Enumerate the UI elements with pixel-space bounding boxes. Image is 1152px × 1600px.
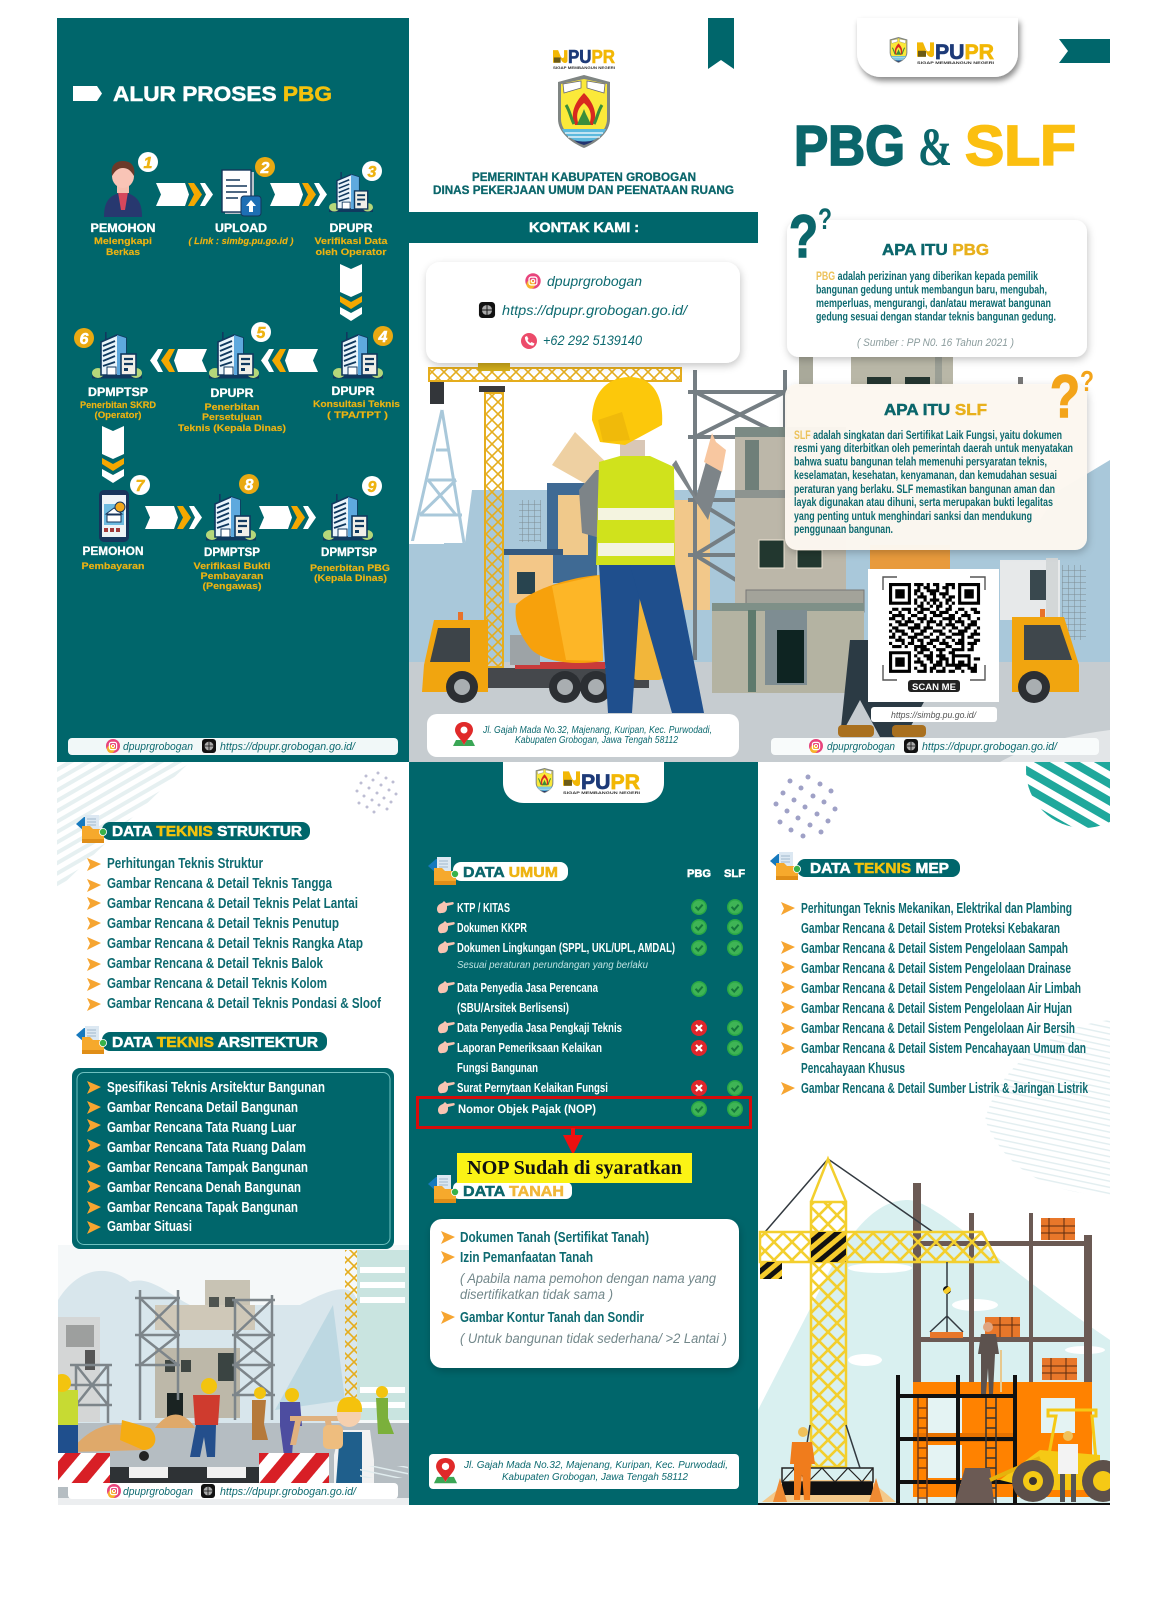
heading: data teknis arsitektur bbox=[76, 1026, 327, 1054]
definition: resmi yang diterbitkan oleh pemerintah daerah untuk menyatakan bbox=[794, 443, 1073, 455]
right background building bbox=[1000, 558, 1086, 648]
heading: data teknis MEP: DATA TEKNIS MEP bbox=[810, 860, 949, 877]
standing worker bbox=[978, 1322, 1002, 1394]
ladders bbox=[918, 1398, 927, 1503]
panel: kontak header bbox=[433, 18, 734, 197]
step 7: pemohon bbox=[82, 475, 150, 572]
checklist: Laporan Pemeriksaan Kelaikan bbox=[457, 1041, 602, 1055]
step 9: dpmptsp: (Kepala Dinas) bbox=[314, 573, 387, 584]
arrow 8-9 bbox=[259, 506, 316, 529]
tab: logos bbox=[857, 18, 1018, 77]
step 9: dpmptsp bbox=[310, 476, 390, 584]
step 5: dpupr bbox=[178, 322, 286, 434]
icon: building bbox=[206, 494, 256, 540]
title: SLF bbox=[965, 114, 1076, 178]
worker bbox=[552, 377, 726, 713]
right truck bbox=[1012, 609, 1079, 703]
step 5: dpupr: Persetujuan bbox=[202, 412, 262, 423]
phone: +62 292 5139140 bbox=[543, 332, 642, 348]
checklist: Data Penyedia Jasa Perencana bbox=[457, 981, 599, 995]
illustration: street construction bbox=[53, 1245, 409, 1505]
step 7: pemohon: PEMOHON bbox=[82, 546, 144, 558]
icon: phone payment bbox=[99, 490, 129, 542]
box: arsitektur list: Spesifikasi Teknis Arsitektur Bangunan bbox=[107, 1080, 325, 1096]
tab: logos: PUPR bbox=[935, 41, 994, 64]
step 8: dpmptsp: Pembayaran bbox=[200, 571, 264, 582]
box: arsitektur list bbox=[72, 1068, 394, 1249]
step 6: dpmptsp: Penerbitan SKRD bbox=[80, 400, 156, 411]
badge 4: 4 bbox=[378, 329, 388, 346]
list: struktur: Perhitungan Teknis Struktur bbox=[107, 856, 263, 872]
blue tower bbox=[412, 410, 464, 543]
definition: yang penting untuk menghindari sanksi dan mendukung bbox=[794, 511, 1032, 523]
card: data tanah: Dokumen Tanah (Sertifikat Tanah) bbox=[460, 1230, 649, 1246]
box: arsitektur list: Gambar Rencana Tampak Bangunan bbox=[107, 1160, 308, 1176]
arrow 4-5 bbox=[261, 349, 318, 372]
address card: Jl. Gajah Mada No.32, Majenang, Kuripan, Kec. Purwodadi, bbox=[482, 725, 712, 736]
icon: question marks: ? bbox=[818, 203, 832, 236]
card: contact bbox=[426, 262, 740, 363]
list: struktur: Gambar Rencana & Detail Teknis Pondasi & Sloof bbox=[107, 996, 381, 1012]
box: arsitektur list: Gambar Rencana Tapak Bangunan bbox=[107, 1200, 298, 1216]
definition: peraturan yang berlaku. SLF memastikan bangunan aman dan bbox=[794, 484, 1055, 496]
checklist: Dokumen Lingkungan (SPPL, UKL/UPL, AMDAL) bbox=[457, 941, 675, 955]
icon: title flag bbox=[73, 86, 102, 101]
website: https://dpupr.grobogan.go.id/ bbox=[502, 302, 689, 318]
step 3: dpupr: oleh Operator bbox=[316, 247, 387, 258]
column headers: SLF bbox=[724, 868, 745, 880]
footer bar: https://dpupr.grobogan.go.id/ bbox=[220, 741, 356, 753]
crane bbox=[429, 363, 681, 667]
icon: person bbox=[104, 161, 142, 217]
agency name: DINAS PEKERJAAN UMUM DAN PEENATAAN RUANG bbox=[433, 185, 734, 197]
title: PBG bbox=[794, 114, 905, 178]
card: apa itu PBG bbox=[787, 203, 1087, 357]
scan brackets bbox=[883, 577, 985, 680]
definition: bahwa suatu bangunan telah memenuhi persyaratan teknis, bbox=[794, 456, 1047, 468]
right towers bbox=[345, 1250, 409, 1425]
panel: data teknis struktur & arsitektur bbox=[57, 762, 409, 1252]
heading: data teknis MEP bbox=[770, 852, 960, 880]
step 9: dpmptsp: DPMPTSP bbox=[321, 547, 377, 559]
checklist: Nomor Objek Pajak (NOP) bbox=[458, 1104, 596, 1116]
tab: logos: SIGAP MEMBANGUN NEGERI bbox=[917, 60, 994, 65]
tab: logos bbox=[503, 762, 664, 803]
list: struktur: Gambar Rencana & Detail Teknis Rangka Atap bbox=[107, 936, 363, 952]
icon: building bbox=[323, 494, 373, 540]
panel: data teknis MEP bbox=[758, 762, 1124, 1505]
ribbon flag bbox=[1059, 39, 1110, 63]
crest: Grobogan bbox=[558, 75, 610, 148]
list: struktur: Gambar Rencana & Detail Teknis Kolom bbox=[107, 976, 327, 992]
heading: data tanah: DATA TANAH bbox=[463, 1183, 564, 1200]
dots decoration bbox=[774, 774, 838, 838]
footer bar: dpuprgrobogan bbox=[123, 1486, 193, 1498]
step 6: dpmptsp bbox=[74, 328, 156, 421]
step 1: pemohon: Berkas bbox=[106, 247, 140, 258]
step 6: dpmptsp: DPMPTSP bbox=[88, 387, 148, 399]
badge 2: 2 bbox=[260, 160, 270, 177]
definition: keselamatan, kesehatan, kenyamanan, dan kemudahan sesuai bbox=[794, 470, 1057, 482]
card: data tanah: Izin Pemanfaatan Tanah bbox=[460, 1250, 593, 1266]
step 3: dpupr: DPUPR bbox=[330, 223, 373, 235]
central building bbox=[712, 427, 864, 693]
card: data tanah: ( Apabila nama pemohon dengan nama yang bbox=[460, 1271, 716, 1286]
icon: question marks: ? bbox=[1080, 366, 1094, 398]
footer bar: dpuprgrobogan bbox=[123, 741, 193, 753]
title: & bbox=[918, 117, 952, 177]
list: struktur: Gambar Rencana & Detail Teknis Balok bbox=[107, 956, 324, 972]
box: arsitektur list: Gambar Rencana Detail Bangunan bbox=[107, 1100, 298, 1116]
list: struktur: Gambar Rencana & Detail Teknis Penutup bbox=[107, 916, 339, 932]
illustration: construction worker scene bbox=[409, 357, 1110, 762]
list: struktur: Gambar Rencana & Detail Teknis Pelat Lantai bbox=[107, 896, 358, 912]
definition: bangunan gedung untuk membangun baru, mengubah, bbox=[816, 284, 1047, 296]
logo: PUPR: PUPR bbox=[568, 47, 615, 67]
left truck with mixer bbox=[422, 575, 649, 703]
address card: Kabupaten Grobogan, Jawa Tengah 58112 bbox=[515, 735, 678, 746]
panel: data umum & data tanah bbox=[409, 762, 758, 1505]
source: ( Sumber : PP N0. 16 Tahun 2021 ) bbox=[857, 337, 1014, 349]
definition: PBG adalah perizinan yang diberikan kepada pemilik bbox=[816, 271, 1038, 283]
definition: penggunaan bangunan. bbox=[794, 524, 893, 536]
footer bar right: dpuprgrobogan bbox=[827, 741, 895, 753]
checklist: Dokumen KKPR bbox=[457, 921, 527, 935]
address card: Jl. Gajah Mada No.32, Majenang, Kuripan, Kec. Purwodadi, bbox=[463, 1460, 728, 1471]
loader bbox=[955, 1410, 1124, 1503]
badge 5: 5 bbox=[257, 325, 267, 342]
footer bar bbox=[68, 1483, 398, 1499]
step 4: dpupr: Konsultasi Teknis bbox=[313, 399, 400, 410]
step 5: dpupr: Penerbitan bbox=[204, 402, 260, 413]
card: data tanah: ( Untuk bangunan tidak sederhana/ >2 Lantai ) bbox=[460, 1331, 727, 1346]
list: MEP: Pencahayaan Khusus bbox=[801, 1061, 905, 1077]
badge 8: 8 bbox=[245, 477, 254, 494]
title bbox=[794, 114, 1076, 178]
skyline bbox=[409, 460, 1110, 662]
left building bbox=[58, 1317, 100, 1422]
icon: building bbox=[92, 332, 142, 378]
step 1: pemohon: Melengkapi bbox=[94, 236, 152, 247]
icon: question marks: ? bbox=[789, 203, 818, 270]
badge 1: 1 bbox=[144, 155, 153, 172]
heading: data umum bbox=[428, 857, 568, 885]
step 1: pemohon bbox=[90, 152, 158, 258]
workers bbox=[53, 1374, 394, 1457]
foreground worker bbox=[323, 1397, 374, 1485]
agency name: PEMERINTAH KABUPATEN GROBOGAN bbox=[472, 172, 696, 184]
step 7: pemohon: Pembayaran bbox=[82, 561, 145, 572]
heading: alur proses: ALUR PROSES PBG bbox=[113, 83, 332, 106]
step 4: dpupr bbox=[313, 326, 400, 421]
tab: logos: SIGAP MEMBANGUN NEGERI bbox=[563, 790, 640, 795]
definition: SLF adalah singkatan dari Sertifikat Laik Fungsi, yaitu dokumen bbox=[794, 430, 1062, 442]
orange worker bbox=[790, 1427, 815, 1500]
step 8: dpmptsp bbox=[194, 474, 270, 592]
heading: data teknis arsitektur: DATA TEKNIS ARSITEKTUR bbox=[112, 1034, 318, 1051]
step 8: dpmptsp: DPMPTSP bbox=[204, 547, 260, 559]
badge 6: 6 bbox=[80, 331, 89, 348]
icon: building bbox=[333, 332, 383, 378]
upper building bbox=[799, 357, 1023, 387]
wood table bbox=[290, 1416, 340, 1445]
checklist bbox=[437, 899, 743, 1117]
bridge bbox=[275, 1305, 345, 1410]
address card: Kabupaten Grobogan, Jawa Tengah 58112 bbox=[502, 1472, 688, 1483]
badge 9: 9 bbox=[368, 479, 377, 496]
ground bbox=[58, 1423, 409, 1505]
card: data tanah bbox=[430, 1219, 739, 1368]
footer bar bbox=[68, 738, 398, 755]
icon: building bbox=[209, 332, 259, 378]
step 1: pemohon: PEMOHON bbox=[90, 223, 156, 235]
badge 7: 7 bbox=[136, 478, 146, 495]
address card bbox=[429, 1454, 739, 1489]
icon: question marks: ? bbox=[1050, 363, 1080, 430]
icon: building bbox=[329, 172, 373, 212]
kontak band: KONTAK KAMI : bbox=[529, 219, 639, 235]
scaffolds bbox=[70, 1290, 275, 1425]
back buildings bbox=[547, 483, 597, 583]
clouds bbox=[848, 1263, 1105, 1366]
step 3: dpupr bbox=[314, 161, 388, 258]
dots decoration bbox=[356, 772, 398, 814]
arrow 7-8 bbox=[145, 506, 202, 529]
bricks bbox=[985, 1218, 1077, 1380]
checklist: (SBU/Arsitek Berlisensi) bbox=[457, 1001, 569, 1015]
footer bar right: https://dpupr.grobogan.go.id/ bbox=[922, 741, 1058, 753]
list: MEP bbox=[781, 901, 1089, 1097]
orange wall bbox=[913, 1382, 1092, 1497]
step 8: dpmptsp: Verifikasi Bukti bbox=[194, 561, 270, 572]
panel: PBG & SLF header bbox=[794, 18, 1110, 178]
icon: document upload bbox=[222, 170, 261, 216]
address card bbox=[427, 714, 739, 757]
step 3: dpupr: Verifikasi Data bbox=[314, 236, 388, 247]
step 2: upload bbox=[188, 157, 294, 247]
checklist: Fungsi Bangunan bbox=[457, 1061, 538, 1075]
faint stripes bbox=[985, 1020, 1110, 1195]
checklist: KTP / KITAS bbox=[457, 901, 510, 915]
sand base bbox=[762, 1480, 896, 1502]
kontak band bbox=[409, 212, 758, 243]
list: struktur: Gambar Rencana & Detail Teknis Tangga bbox=[107, 876, 333, 892]
checklist: Data Penyedia Jasa Pengkaji Teknis bbox=[457, 1021, 622, 1035]
arrow 1-2 bbox=[156, 183, 213, 206]
definition bbox=[816, 271, 1056, 324]
step 8: dpmptsp: (Pengawas) bbox=[202, 581, 262, 592]
panel: alur proses PBG bbox=[57, 18, 409, 762]
badge 3: 3 bbox=[368, 164, 377, 181]
arrow 2-3 bbox=[270, 183, 327, 206]
card: apa itu SLF bbox=[785, 363, 1094, 550]
checklist: Surat Pernytaan Kelaikan Fungsi bbox=[457, 1081, 608, 1095]
second worker bbox=[838, 545, 950, 737]
heading: APA ITU SLF bbox=[884, 402, 987, 419]
heading: data teknis struktur: DATA TEKNIS STRUKTUR bbox=[112, 823, 302, 840]
QR pattern bbox=[889, 585, 980, 671]
distant skyline bbox=[58, 1271, 357, 1425]
callout: NOP highlight box bbox=[418, 1098, 750, 1128]
scan me tag: SCAN ME bbox=[912, 682, 956, 693]
card: data tanah: disertifikatkan tidak sama ) bbox=[460, 1287, 613, 1302]
center building bbox=[155, 1280, 255, 1421]
instagram: dpuprgrobogan bbox=[547, 273, 642, 289]
crane base bbox=[782, 1425, 873, 1495]
footer bar: https://dpupr.grobogan.go.id/ bbox=[220, 1486, 357, 1498]
box: arsitektur list: Gambar Rencana Tata Ruang Luar bbox=[107, 1120, 296, 1136]
hill bbox=[758, 1200, 1110, 1505]
scaffolding bbox=[688, 370, 790, 660]
logo: PUPR bbox=[553, 47, 615, 70]
illustration: tower crane and building bbox=[758, 1159, 1124, 1505]
url pill: https://simbg.pu.go.id/ bbox=[891, 710, 977, 721]
arrow: red down arrow bbox=[563, 1128, 583, 1155]
step 6: dpmptsp: (Operator) bbox=[94, 410, 142, 421]
heading: APA ITU PBG bbox=[882, 242, 989, 259]
tab: logos: PUPR bbox=[581, 771, 640, 794]
columns and beams bbox=[913, 1183, 1092, 1382]
step 5: dpupr: Teknis (Kepala Dinas) bbox=[178, 423, 286, 434]
definition bbox=[794, 430, 1073, 536]
card: data tanah: Gambar Kontur Tanah dan Sondir bbox=[460, 1310, 644, 1326]
box: arsitektur list: Gambar Rencana Tata Ruang Dalam bbox=[107, 1140, 306, 1156]
step 4: dpupr: ( TPA/TPT ) bbox=[327, 410, 388, 421]
callout: NOP label bbox=[457, 1153, 692, 1183]
column headers bbox=[687, 868, 745, 880]
sand piles bbox=[70, 1414, 195, 1452]
step 4: dpupr: DPUPR bbox=[332, 386, 375, 398]
definition: memperluas, mengurangi, dan/atau merawat bangunan bbox=[816, 298, 1051, 310]
box: arsitektur list: Gambar Situasi bbox=[107, 1219, 192, 1235]
column headers: PBG bbox=[687, 868, 711, 880]
ribbon bookmark bbox=[708, 18, 734, 69]
url pill bbox=[871, 707, 997, 722]
black scaffold bbox=[896, 1375, 1017, 1503]
mixer bbox=[120, 1420, 155, 1461]
arrow 5-6 bbox=[150, 349, 207, 372]
step 2: upload: UPLOAD bbox=[215, 223, 267, 235]
heading: data umum: DATA UMUM bbox=[463, 864, 558, 881]
definition: gedung sesuai dengan standar teknis bangunan gedung. bbox=[816, 312, 1056, 324]
QR code card bbox=[868, 569, 999, 702]
step 2: upload: ( Link : simbg.pu.go.id ) bbox=[188, 236, 294, 247]
agency name bbox=[433, 172, 734, 197]
callout: NOP label: NOP Sudah di syaratkan bbox=[467, 1157, 682, 1179]
checklist: Sesuai peraturan perundangan yang berlaku bbox=[457, 960, 648, 971]
logo: PUPR: SIGAP MEMBANGUN NEGERI bbox=[553, 65, 615, 70]
step 9: dpmptsp: Penerbitan PBG bbox=[310, 563, 390, 574]
definition: layak digunakan atau dihuni, serta merupakan bukti legalitas bbox=[794, 497, 1053, 509]
crane bbox=[760, 1159, 998, 1467]
arrow 3-4 bbox=[340, 264, 362, 321]
traffic cones bbox=[773, 1478, 883, 1502]
arrow 6-7 bbox=[102, 426, 124, 483]
list: struktur bbox=[87, 856, 381, 1012]
road strip bbox=[110, 1466, 408, 1483]
heading: data tanah bbox=[428, 1175, 572, 1203]
box: arsitektur list: Gambar Rencana Denah Bangunan bbox=[107, 1180, 301, 1196]
footer bar right bbox=[771, 738, 1099, 755]
stripe circle bbox=[1026, 762, 1110, 828]
heading: data teknis struktur bbox=[76, 815, 310, 843]
step 5: dpupr: DPUPR bbox=[210, 388, 254, 400]
barriers bbox=[58, 1453, 329, 1487]
